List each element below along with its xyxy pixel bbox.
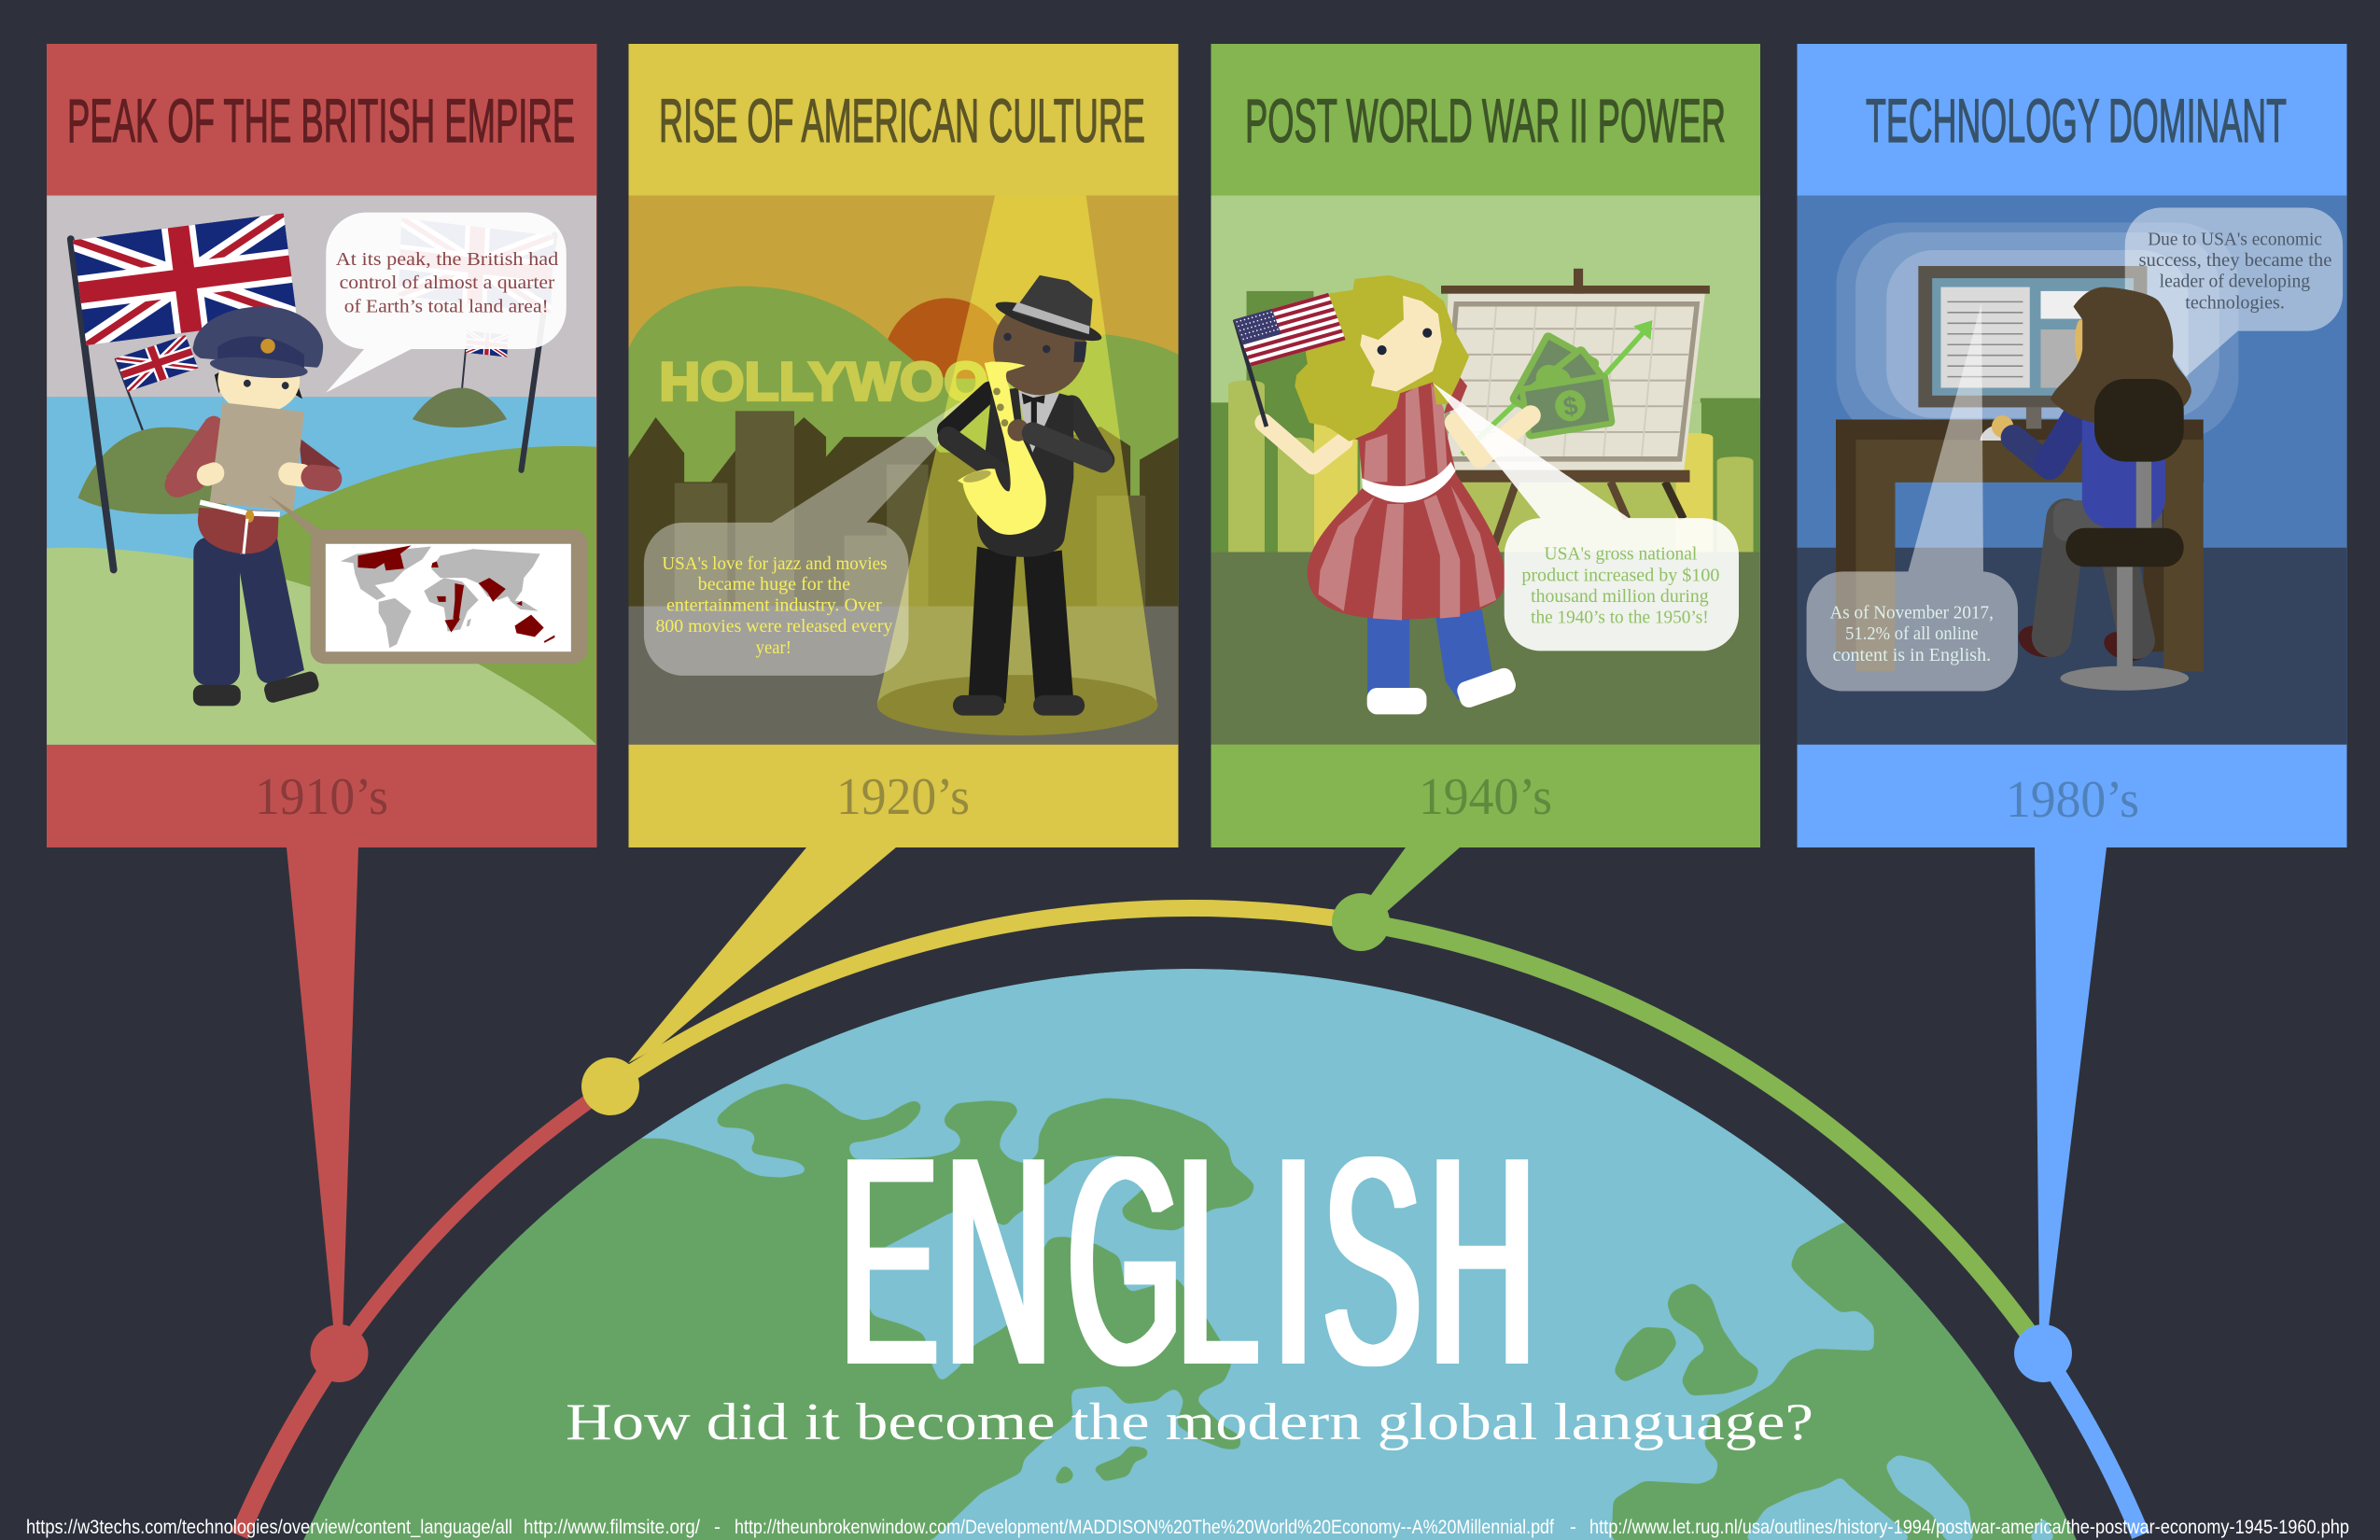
callout: British land area: control of almost a quarter xyxy=(340,273,555,293)
sources: https://w3techs.com/technologies/overview/content_language/all xyxy=(26,1517,512,1538)
callout: gross national product: USA's gross national xyxy=(1544,544,1698,564)
timeline dot: 1940s xyxy=(1332,893,1390,951)
callout: technology leader: technologies. xyxy=(2185,293,2285,314)
callout: technology leader: success, they became the xyxy=(2138,251,2332,271)
callout: online content statistic: 51.2% of all online xyxy=(1845,624,1979,644)
panel: 1920s American culture xyxy=(628,44,1178,847)
year label: 1920's: 1920’s xyxy=(836,768,970,826)
callout: jazz and movies xyxy=(644,396,969,676)
callout: technology leader: leader of developing xyxy=(2160,272,2310,292)
year label: 1980's: 1980’s xyxy=(2006,771,2139,829)
callout: gross national product: product increased by $100 xyxy=(1521,566,1720,585)
callout: British land area: At its peak, the British had xyxy=(336,250,558,270)
globe xyxy=(229,969,2148,1540)
arrow: yellow pointer xyxy=(628,847,896,1063)
callout: technology leader xyxy=(2125,208,2343,377)
sources xyxy=(26,1517,2349,1538)
heading: post World War II power: POST WORLD WAR II POWER xyxy=(1245,86,1726,155)
callout: jazz and movies: became huge for the xyxy=(698,575,850,595)
timeline dot: 1910s xyxy=(310,1324,368,1382)
Hollywood sign: HOLLYWOOD xyxy=(659,353,1029,413)
sources: - xyxy=(1570,1517,1576,1538)
arrow: blue pointer xyxy=(2035,847,2107,1335)
heading: peak of the British Empire: PEAK OF THE BRITISH EMPIRE xyxy=(67,86,575,155)
sources: http://theunbrokenwindow.com/Development/MADDISON%20The%20World%20Economy--A%20Millennial.pdf xyxy=(735,1517,1554,1538)
icon: American flag xyxy=(1234,293,1346,427)
timeline dot: 1980s xyxy=(2014,1324,2072,1382)
spotlight xyxy=(877,195,1158,735)
panel: 1940s post war power xyxy=(1211,44,1760,847)
illustration: girl with chart and flag xyxy=(1211,195,1760,745)
arrow: red pointer xyxy=(287,847,358,1335)
subtitle: How did it become the modern global language? xyxy=(566,1393,1813,1451)
illustration: soldier with map xyxy=(47,195,596,745)
callout: British land area xyxy=(326,213,567,393)
saxophone player figure xyxy=(946,275,1104,716)
computer monitor xyxy=(1918,266,2147,441)
callout: jazz and movies: entertainment industry. Over xyxy=(666,595,882,616)
callout: British land area: of Earth’s total land area! xyxy=(344,297,549,316)
year label: 1940's: 1940’s xyxy=(1419,768,1552,826)
callout: gross national product: the 1940’s to the 1950’s! xyxy=(1531,608,1709,627)
world map of the British Empire xyxy=(268,495,587,664)
title: ENGLISH: ENGLISH xyxy=(840,1096,1536,1427)
callout: online content statistic: content is in English. xyxy=(1833,646,1991,665)
callout: online content statistic xyxy=(1807,303,2018,692)
illustration: jazz saxophonist in Hollywood xyxy=(628,195,1178,745)
callout: gross national product xyxy=(1433,383,1739,651)
callout: jazz and movies: USA's love for jazz and movies xyxy=(662,554,888,574)
heading: rise of American culture: RISE OF AMERICAN CULTURE xyxy=(659,86,1145,155)
callout: gross national product: thousand million during xyxy=(1531,587,1709,607)
soldier figure xyxy=(166,306,341,706)
easel with growth chart and money: $ xyxy=(1561,390,1579,422)
callout: online content statistic: As of November 2017, xyxy=(1829,603,1994,623)
timeline dot: 1920s xyxy=(581,1057,639,1115)
easel with growth chart and money xyxy=(1441,269,1710,545)
sources: http://www.filmsite.org/ xyxy=(524,1517,700,1538)
seated person from behind xyxy=(1992,287,2191,691)
timeline arcs xyxy=(239,908,2141,1535)
desk xyxy=(1836,419,2204,672)
girl figure xyxy=(1264,275,1531,714)
callout: technology leader: Due to USA's economic xyxy=(2148,230,2322,250)
sources: - xyxy=(714,1517,721,1538)
callout: jazz and movies: year! xyxy=(756,638,791,658)
panel: 1910s British Empire xyxy=(47,44,597,847)
panel: 1980s technology dominant xyxy=(1797,44,2346,847)
arrow: green pointer xyxy=(1353,847,1460,929)
callout: jazz and movies: 800 movies were released every xyxy=(656,617,893,637)
illustration: person at computer xyxy=(1797,195,2346,745)
year label: 1910's: 1910’s xyxy=(255,768,388,826)
